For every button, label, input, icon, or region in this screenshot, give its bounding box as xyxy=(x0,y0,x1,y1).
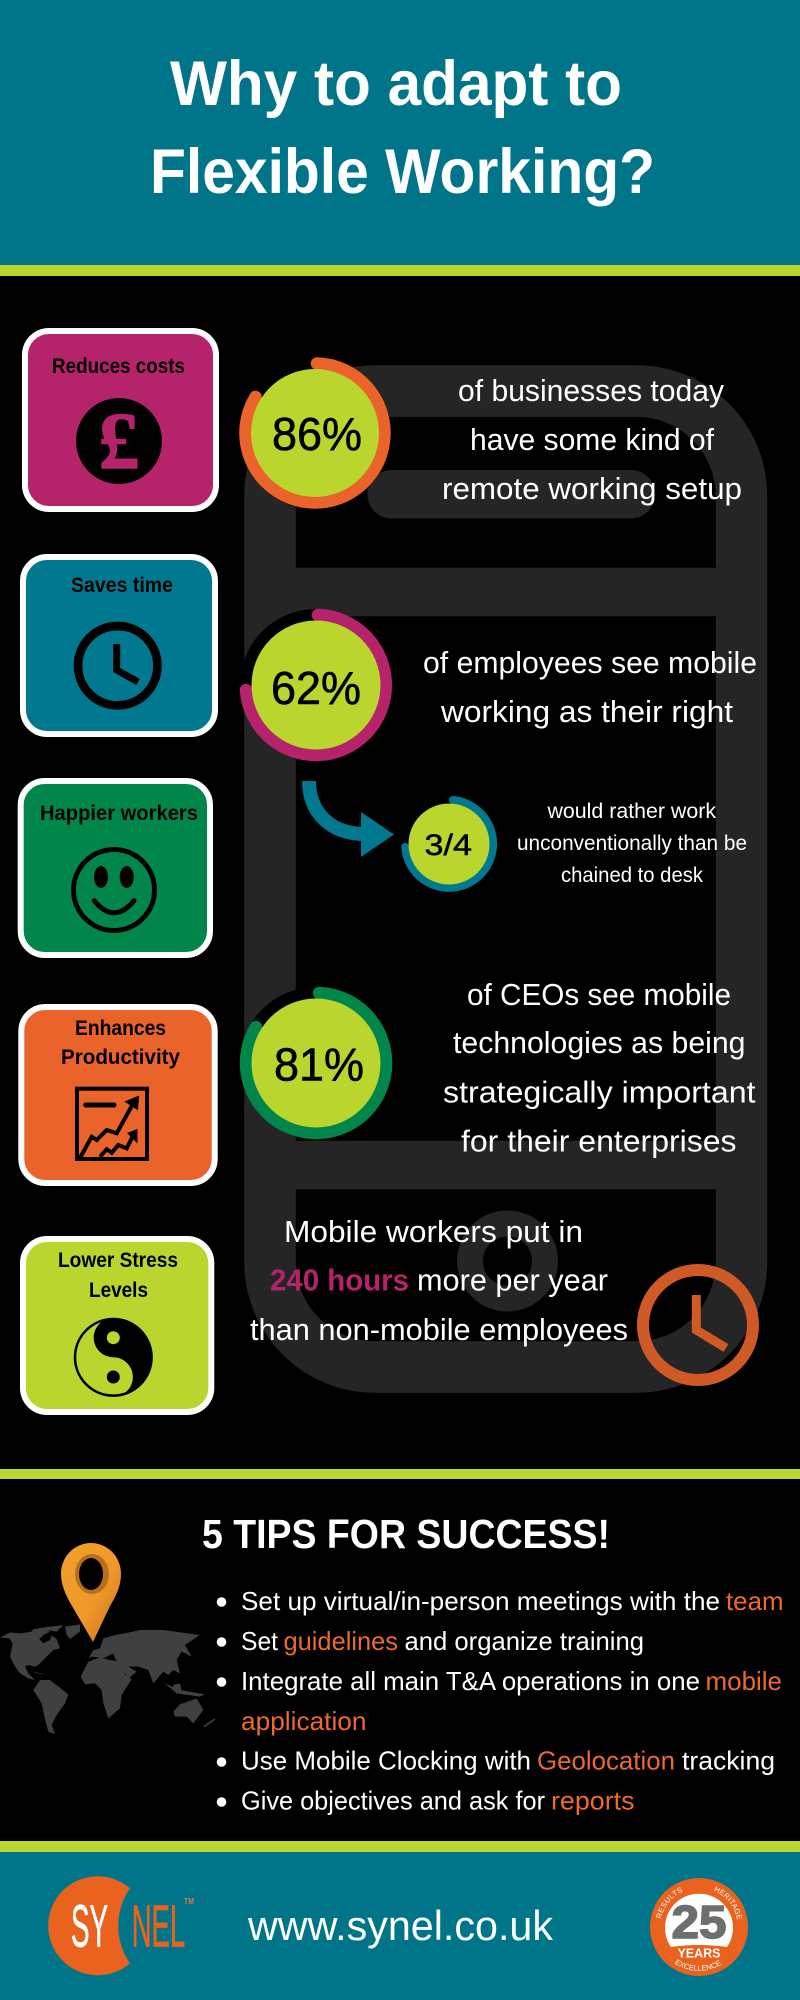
footer band xyxy=(0,1852,800,2000)
badge: 25 years xyxy=(650,1878,748,1976)
tips list xyxy=(217,1586,783,1816)
icon: clock xyxy=(78,626,157,705)
panel: saves time: Saves time xyxy=(71,574,173,597)
panel: lower stress levels: Levels xyxy=(89,1279,148,1302)
website url: www.synel.co.uk xyxy=(247,1902,554,1949)
stat: three quarters xyxy=(401,796,497,892)
icon: location pin xyxy=(61,1543,121,1642)
stat: 81 percent xyxy=(240,987,392,1139)
title xyxy=(150,49,655,207)
stat text: unconventional: unconventionally than be xyxy=(517,832,747,855)
stat: 86 percent xyxy=(239,357,391,509)
title: Flexible Working? xyxy=(150,137,655,207)
stat text: employees: working as their right xyxy=(440,694,733,729)
tips list: guidelines xyxy=(284,1626,398,1656)
stat text: CEOs: of CEOs see mobile xyxy=(467,977,731,1012)
tips list: application xyxy=(241,1706,366,1736)
stat text: unconventional: would rather work xyxy=(546,800,717,823)
tips list: team xyxy=(726,1586,784,1616)
stat: 86 percent: 86% xyxy=(272,408,362,460)
panel: saves time xyxy=(23,557,215,734)
panel: enhances productivity: Productivity xyxy=(61,1046,180,1069)
stat text: employees xyxy=(423,645,757,729)
badge: 25 years: HERITAGE xyxy=(714,1886,742,1920)
stat text: employees: of employees see mobile xyxy=(423,645,757,680)
stat: 62 percent xyxy=(240,609,392,761)
tips heading: 5 TIPS FOR SUCCESS! xyxy=(202,1511,610,1557)
tips list: Give objectives and ask for xyxy=(241,1786,545,1816)
tips list: Integrate all main T&A operations in one xyxy=(241,1666,700,1696)
stat text: businesses xyxy=(442,373,742,506)
panel: enhances productivity: Enhances xyxy=(75,1017,166,1040)
icon: smiley xyxy=(74,850,154,930)
panel: reduces costs xyxy=(25,331,216,509)
logo: Synel: NEL xyxy=(132,1894,185,1960)
logo: Synel xyxy=(48,1876,194,1975)
footer divider xyxy=(0,1841,800,1852)
tips list: mobile xyxy=(706,1666,782,1696)
panel: enhances productivity xyxy=(21,1007,215,1183)
stat text: CEOs: strategically important xyxy=(443,1074,756,1110)
stat text: CEOs: for their enterprises xyxy=(461,1124,736,1158)
logo: Synel: SY xyxy=(71,1894,108,1960)
stat text: businesses: of businesses today xyxy=(458,373,724,408)
panel: happier workers xyxy=(21,781,210,955)
stat text: 240 hours xyxy=(250,1214,628,1347)
tips list: Set up virtual/in-person meetings with the xyxy=(241,1586,720,1616)
stat text: 240 hours: 240 hours xyxy=(270,1262,409,1298)
badge: 25 years: 25 xyxy=(672,1896,726,1948)
badge: 25 years: EXCELLENCE xyxy=(674,1959,722,1971)
icon: pound coin xyxy=(76,396,162,486)
tips list: reports xyxy=(551,1786,634,1816)
badge: 25 years: RESULTS xyxy=(656,1888,682,1918)
header divider xyxy=(0,265,800,276)
panel: lower stress levels: Lower Stress xyxy=(58,1249,178,1272)
stat text: CEOs: technologies as being xyxy=(453,1025,746,1060)
tips list: tracking xyxy=(682,1746,775,1776)
tips divider xyxy=(0,1469,800,1479)
stat text: unconventional xyxy=(517,800,747,887)
header band xyxy=(0,0,800,265)
tips list: Geolocation xyxy=(537,1746,675,1776)
stat text: 240 hours: more per year xyxy=(417,1262,608,1298)
stat: 62 percent: 62% xyxy=(271,662,361,714)
panel: reduces costs: Reduces costs xyxy=(52,355,185,378)
logo: Synel: TM xyxy=(184,1897,194,1906)
world map xyxy=(0,1624,215,1734)
icon: growth chart xyxy=(77,1089,147,1159)
title: Why to adapt to xyxy=(170,49,622,119)
background phone graphic xyxy=(270,391,742,1367)
tips list: Use Mobile Clocking with xyxy=(241,1746,531,1776)
stat: 81 percent: 81% xyxy=(274,1038,364,1090)
stat text: unconventional: chained to desk xyxy=(561,864,703,887)
stat text: 240 hours: Mobile workers put in xyxy=(284,1214,583,1249)
panel: lower stress levels xyxy=(23,1239,211,1412)
arrow: curved teal xyxy=(309,781,394,857)
tips list: Set xyxy=(241,1626,279,1656)
stat text: CEOs xyxy=(443,977,756,1158)
stat text: businesses: remote working setup xyxy=(442,471,742,506)
stat: three quarters: 3/4 xyxy=(424,829,472,862)
icon: yin yang xyxy=(75,1318,153,1397)
stat text: businesses: have some kind of xyxy=(470,422,714,457)
tips list: and organize training xyxy=(404,1626,644,1656)
badge: 25 years: YEARS xyxy=(677,1947,721,1961)
icon: orange clock xyxy=(643,1270,753,1380)
stat text: 240 hours: than non-mobile employees xyxy=(250,1312,628,1347)
icon: pound coin: £ xyxy=(99,396,139,486)
panel: happier workers: Happier workers xyxy=(40,802,198,825)
